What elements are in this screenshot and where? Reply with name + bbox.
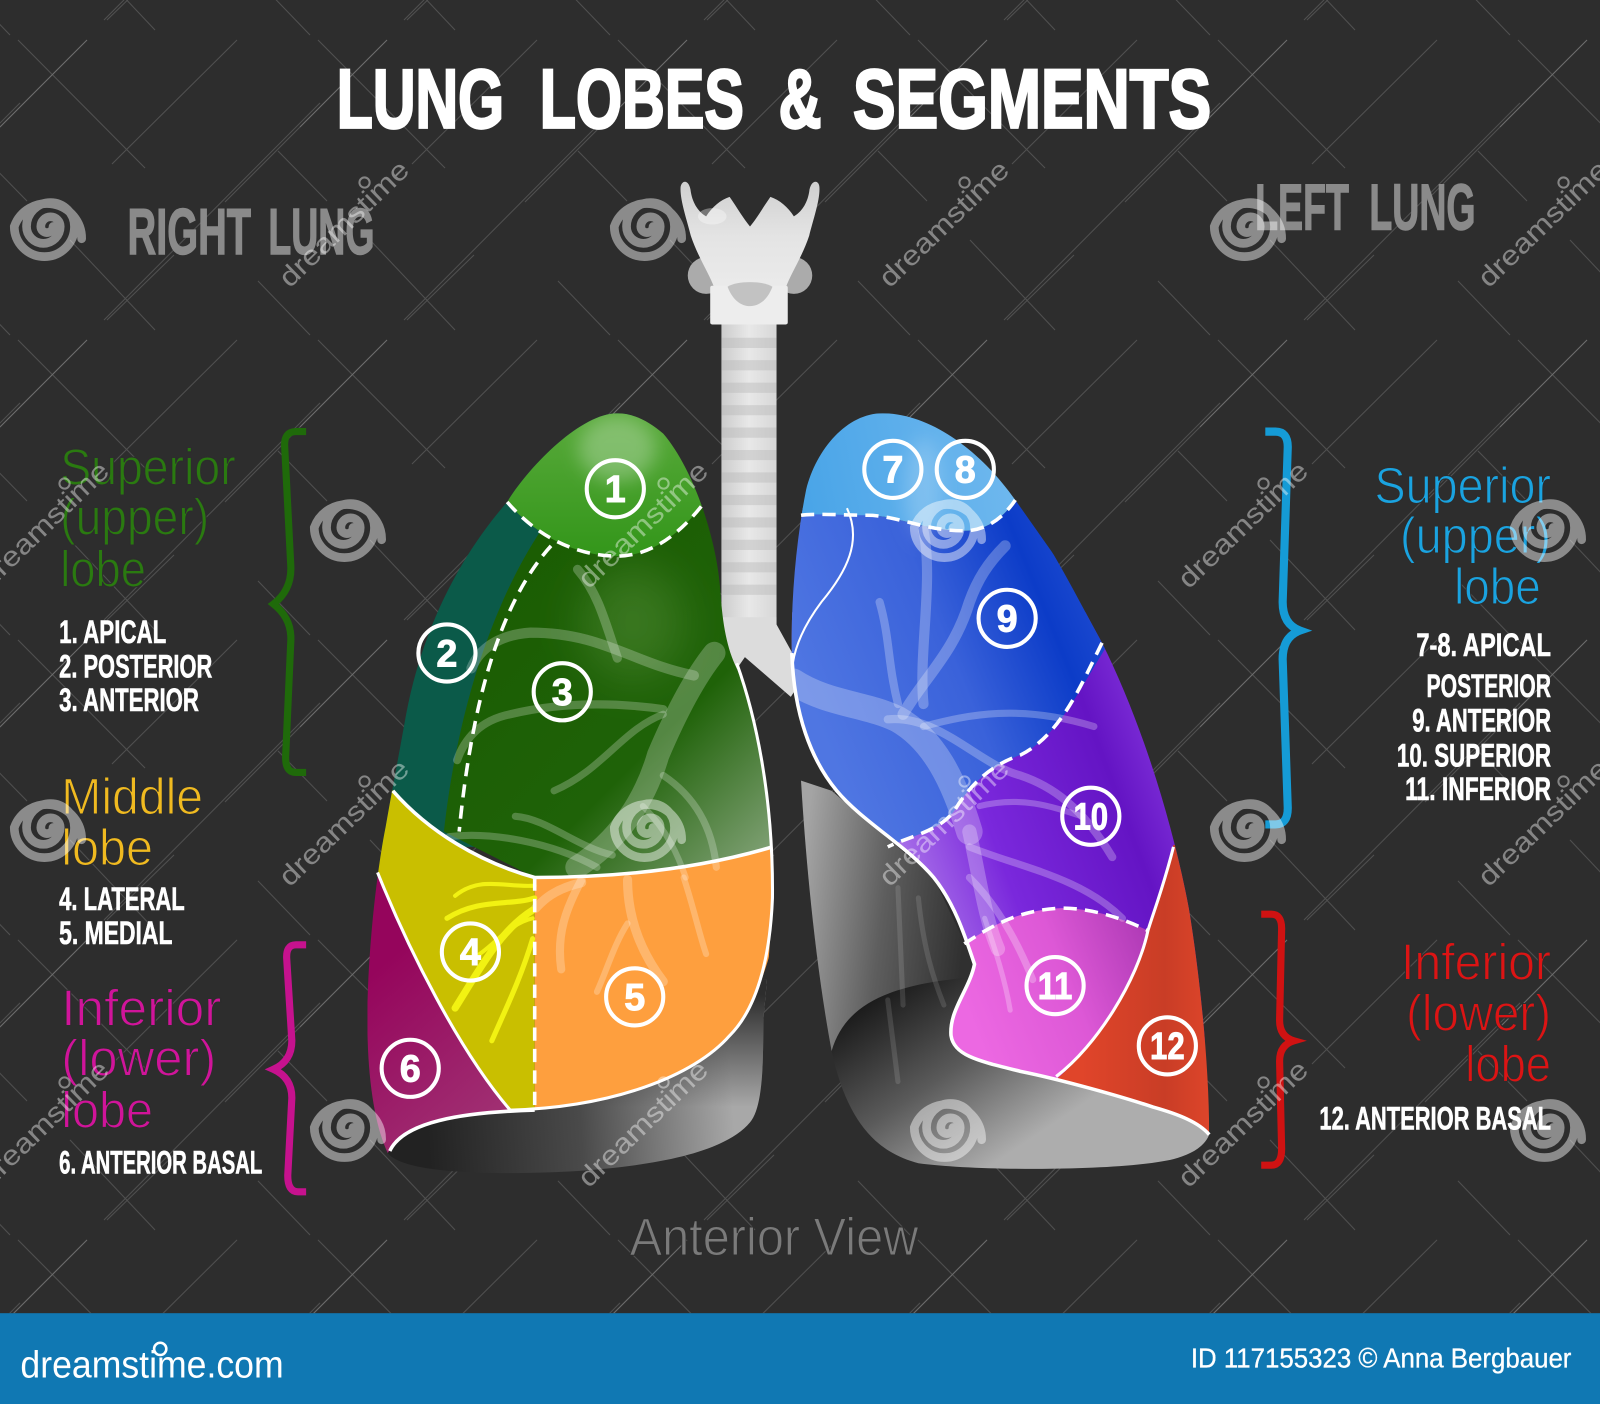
label: inferior lower lobe: Inferior [61,979,221,1036]
footer band [0,1313,1600,1404]
list: segments 7-11 [1397,626,1551,807]
tracheal tube [721,324,777,626]
cricoid notch [728,282,772,306]
cricoid block [710,286,788,324]
label: superior upper lobe [60,439,236,598]
caption: anterior view: Anterior View [630,1208,919,1267]
segment 6 anterior basal [367,876,508,1153]
badge 2: 2 [436,632,457,674]
label: middle lobe [61,768,203,876]
watermark wordmarks: dreamstime [872,154,1015,293]
heading: right lung: RIGHT [128,195,251,268]
label: superior upper lobe: Superior [1374,457,1551,514]
badge 5 [606,968,663,1025]
heading: left lung: LEFT [1255,171,1349,244]
left lung white separators [792,500,1209,1135]
list: segments 4-5: 5. MEDIAL [59,914,172,951]
badge 10 [1062,788,1119,845]
brace: right inferior lobe [273,945,306,1192]
badge 3 [534,663,591,720]
watermark wordmarks: dreamstime [1171,1054,1314,1193]
watermark wordmarks [0,151,1600,1193]
badge 6 [382,1040,439,1097]
label: superior upper lobe: lobe [60,541,146,598]
badge 3: 3 [552,671,573,713]
segment 7-8 apical posterior [802,413,1016,531]
right lung colored segments [367,413,771,1173]
left lung [776,403,1224,1169]
right lung [367,413,774,1173]
label: inferior lower lobe: Inferior [1401,934,1551,991]
badge 5: 5 [624,976,645,1018]
segment 12 anterior basal [1058,844,1210,1132]
label: superior upper lobe [1374,457,1551,615]
text block: left inferior lobe [1319,934,1551,1137]
side cartilage blobs [688,257,812,294]
segment 9 anterior [776,500,1112,847]
trachea and larynx [681,182,819,697]
faint bronchi in gray part [888,888,944,1082]
list: segments 1-3: 2. POSTERIOR [59,648,212,685]
segment number badges [382,441,1196,1097]
label: middle lobe: lobe [61,819,153,876]
text block: middle lobe [59,768,203,951]
watermark wordmarks: dreamstime [1171,455,1314,594]
label: superior upper lobe: (upper) [1400,507,1551,564]
text block: right superior lobe [59,439,236,718]
lower gray shell [368,980,767,1173]
badge 12 [1139,1017,1196,1074]
badge 10: 10 [1073,796,1108,838]
footer credit: ID 117155323 © Anna Bergbauer [1191,1342,1571,1373]
label: inferior lower lobe: lobe [1465,1036,1551,1093]
apex highlight [905,439,942,541]
badge 12: 12 [1150,1025,1185,1067]
label: superior upper lobe: lobe [1454,558,1541,615]
list: segments 1-3 [59,613,212,718]
list: segments 4-5: 4. LATERAL [59,880,185,917]
thyroid cartilage [681,182,819,288]
list: segments 1-3: 3. ANTERIOR [59,681,199,718]
yellow bronchi in segment 4 [447,884,535,1041]
segment 3 soft light [582,566,684,679]
badge 1 [587,460,644,517]
watermark wordmarks: dreamstime [571,1054,714,1193]
right lung white separators [378,500,772,1151]
badge 9: 9 [997,598,1018,640]
title: LOBES [540,52,744,146]
segment 1 apical [507,413,702,556]
text block: left superior lobe [1374,457,1551,807]
badge 8: 8 [955,449,976,491]
badge 11: 11 [1038,965,1072,1007]
segment 3 anterior [444,490,786,878]
watermark wordmarks: dreamstime [1471,753,1600,892]
segment 10 superior [786,612,1224,1041]
watermark wordmarks: dreamstime [272,154,415,293]
list: segments 7-11: 7-8. APICAL [1416,626,1551,663]
list: segments 1-3: 1. APICAL [59,613,166,650]
segment 4 lateral [378,790,535,1109]
badge 4 [442,923,499,981]
badge 9 [979,590,1036,647]
watermark wordmarks: dreamstime [272,753,415,892]
badge 7: 7 [882,449,903,491]
title [337,52,1211,146]
text block: right inferior lobe [59,979,262,1180]
bronchial fork [713,617,806,697]
footer logo: dreamstime.com [20,1343,284,1385]
title: & [779,52,821,146]
label: inferior lower lobe: (lower) [61,1029,216,1086]
segment 5 medial [535,843,786,1110]
title: LUNG [337,52,504,146]
title: SEGMENTS [853,52,1211,146]
watermark spirals [14,203,1582,1158]
watermark wordmarks: dreamstime [872,753,1015,892]
brace: right superior lobe [273,432,306,772]
badge 1: 1 [605,468,626,510]
heading: left lung: LUNG [1369,171,1476,244]
left bronchial tree [793,531,1122,1010]
badge 6: 6 [400,1048,421,1090]
label: inferior lower lobe [61,979,221,1138]
badge 2 [418,624,476,682]
label: superior upper lobe: Superior [60,439,236,496]
badge 8 [937,441,994,498]
list: segments 4-5 [59,880,185,951]
segment 2 posterior [382,413,632,847]
badge 11 [1027,957,1084,1014]
heading: right lung: LUNG [268,195,374,268]
label: inferior lower lobe: (lower) [1406,985,1551,1042]
brace: left inferior lobe [1261,914,1294,1165]
brace: left superior lobe [1265,432,1300,824]
label: inferior lower lobe: lobe [61,1081,153,1138]
badge 7 [864,441,921,498]
apex highlight [579,416,656,482]
medial gray part [801,781,974,1051]
lower gray shell [832,977,1209,1169]
shield highlight [698,208,727,224]
label: superior upper lobe: (upper) [60,489,209,546]
label: inferior lower lobe [1401,934,1551,1093]
segment 11 inferior [952,908,1146,1078]
watermark wordmarks: dreamstime [1471,154,1600,293]
left lung colored segments [792,413,1210,1132]
watermark wordmarks: dreamstime [571,455,714,594]
label: middle lobe: Middle [61,768,203,825]
right bronchial tree [449,569,716,992]
list: segment 6: 6. ANTERIOR BASAL [59,1143,262,1180]
badge 4: 4 [460,931,481,973]
